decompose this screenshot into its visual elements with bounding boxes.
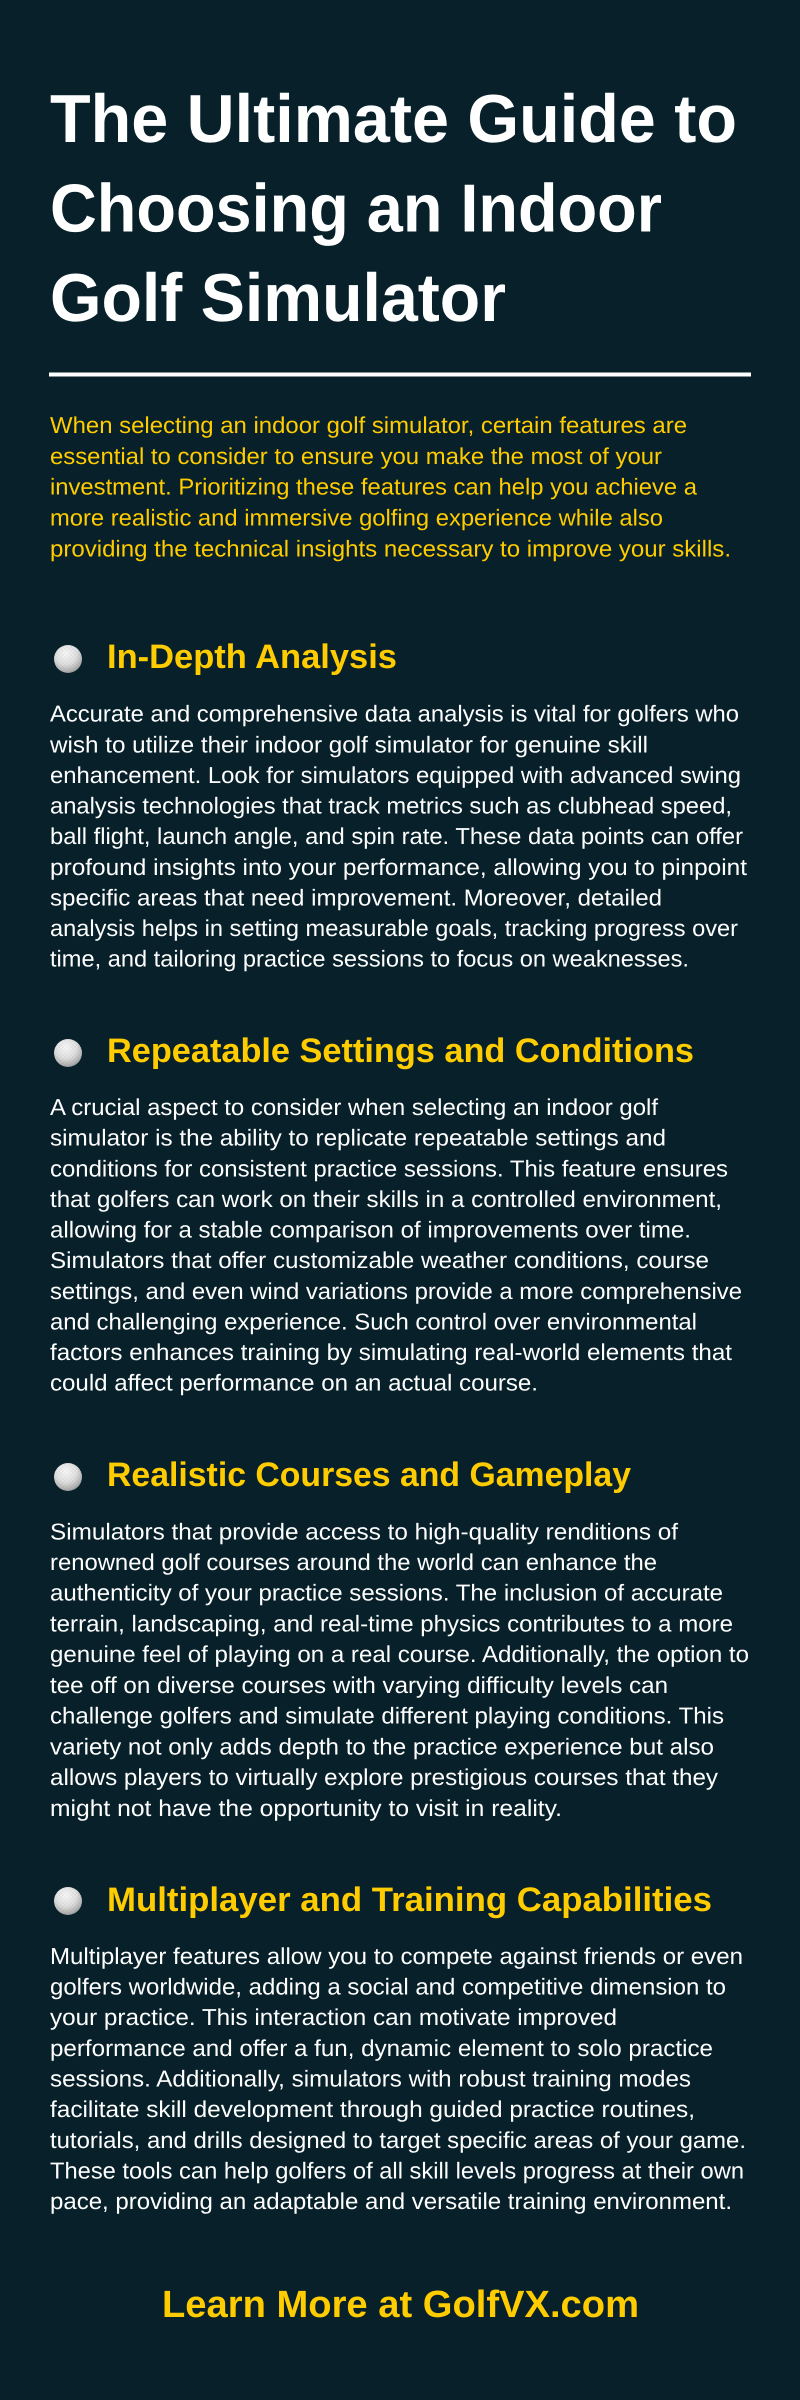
body text: Repeatable Settings and Conditions: conditions for consistent practice sessions. This feature ensures bbox=[50, 1155, 728, 1181]
body text: Multiplayer and Training Capabilities: pace, providing an adaptable and versatile training environment. bbox=[50, 2188, 732, 2214]
body text: Realistic Courses and Gameplay: challenge golfers and simulate different playing conditions. This bbox=[50, 1703, 724, 1729]
body text: Realistic Courses and Gameplay: allows players to virtually explore prestigious courses that they bbox=[50, 1764, 719, 1790]
body text: Multiplayer and Training Capabilities: performance and offer a fun, dynamic element to solo practice bbox=[50, 2035, 713, 2061]
body text: Multiplayer and Training Capabilities: your practice. This interaction can motivate improved bbox=[50, 2004, 617, 2030]
body text: In-Depth Analysis: enhancement. Look for simulators equipped with advanced swing bbox=[50, 762, 741, 788]
icon: golf ball bbox=[54, 1463, 82, 1491]
heading: Realistic Courses and Gameplay: Realistic Courses and Gameplay bbox=[107, 1456, 631, 1494]
body text: In-Depth Analysis bbox=[49, 701, 748, 972]
body text: Multiplayer and Training Capabilities: sessions. Additionally, simulators with robust training modes bbox=[50, 2066, 691, 2092]
body text: Repeatable Settings and Conditions: simulator is the ability to replicate repeatable settings and bbox=[50, 1125, 666, 1151]
body text: Repeatable Settings and Conditions: A crucial aspect to consider when selecting an indoor golf bbox=[50, 1094, 659, 1120]
body text: In-Depth Analysis: wish to utilize their indoor golf simulator for genuine skill bbox=[49, 731, 648, 757]
body text: In-Depth Analysis: Accurate and comprehensive data analysis is vital for golfers who bbox=[50, 701, 739, 727]
body text: Multiplayer and Training Capabilities: Multiplayer features allow you to compete against friends or even bbox=[50, 1943, 743, 1969]
body text: Realistic Courses and Gameplay: variety not only adds depth to the practice experience but also bbox=[50, 1733, 714, 1759]
intro text: providing the technical insights necessary to improve your skills. bbox=[50, 535, 731, 561]
body text: Repeatable Settings and Conditions: Simulators that offer customizable weather conditions, course bbox=[50, 1247, 709, 1273]
panel: Repeatable Settings and Conditions bbox=[50, 1032, 742, 1396]
intro text: When selecting an indoor golf simulator, certain features are bbox=[50, 412, 687, 438]
body text: Realistic Courses and Gameplay: renowned golf courses around the world can enhance the bbox=[50, 1549, 657, 1575]
icon: golf ball bbox=[54, 645, 82, 673]
body text: Multiplayer and Training Capabilities: golfers worldwide, adding a social and competitive dimension to bbox=[50, 1974, 726, 2000]
body text: Repeatable Settings and Conditions: allowing for a stable comparison of improvements over time. bbox=[50, 1216, 691, 1242]
heading: Multiplayer and Training Capabilities: Multiplayer and Training Capabilities bbox=[107, 1881, 712, 1919]
body text: In-Depth Analysis: time, and tailoring practice sessions to focus on weaknesses. bbox=[50, 946, 689, 972]
body text: Realistic Courses and Gameplay: terrain, landscaping, and real-time physics contributes to a more bbox=[50, 1610, 733, 1636]
body text: Repeatable Settings and Conditions: and challenging experience. Such control over environmental bbox=[50, 1308, 697, 1334]
body text: Realistic Courses and Gameplay: tee off on diverse courses with varying difficulty levels can bbox=[50, 1672, 668, 1698]
body text: Repeatable Settings and Conditions bbox=[50, 1094, 742, 1396]
intro text: more realistic and immersive golfing experience while also bbox=[50, 504, 663, 530]
body text: Repeatable Settings and Conditions: settings, and even wind variations provide a more comprehensive bbox=[50, 1278, 742, 1304]
heading: In-Depth Analysis: In-Depth Analysis bbox=[107, 638, 397, 676]
body text: In-Depth Analysis: profound insights into your performance, allowing you to pinpoint bbox=[50, 854, 748, 880]
intro text: investment. Prioritizing these features can help you achieve a bbox=[50, 474, 697, 500]
title bbox=[50, 81, 737, 336]
icon: golf ball bbox=[54, 1887, 82, 1915]
intro text: essential to consider to ensure you make the most of your bbox=[50, 443, 662, 469]
body text: In-Depth Analysis: analysis technologies that track metrics such as clubhead speed, bbox=[50, 793, 732, 819]
footer call to action: Learn More at GolfVX.com bbox=[162, 2284, 639, 2326]
icon: golf ball bbox=[54, 1039, 82, 1067]
panel: Realistic Courses and Gameplay bbox=[50, 1456, 749, 1821]
body text: In-Depth Analysis: ball flight, launch angle, and spin rate. These data points can offer bbox=[50, 823, 743, 849]
body text: Realistic Courses and Gameplay bbox=[50, 1518, 749, 1821]
title: Choosing an Indoor bbox=[50, 170, 662, 246]
title: Golf Simulator bbox=[50, 260, 506, 336]
body text: Multiplayer and Training Capabilities bbox=[50, 1943, 746, 2214]
body text: In-Depth Analysis: specific areas that need improvement. Moreover, detailed bbox=[50, 884, 662, 910]
body text: Repeatable Settings and Conditions: that golfers can work on their skills in a controlled environment, bbox=[50, 1186, 722, 1212]
panel: In-Depth Analysis bbox=[49, 638, 748, 972]
body text: Multiplayer and Training Capabilities: facilitate skill development through guided practice routines, bbox=[50, 2096, 695, 2122]
body text: Realistic Courses and Gameplay: Simulators that provide access to high-quality renditions of bbox=[50, 1518, 679, 1544]
title: The Ultimate Guide to bbox=[50, 81, 737, 157]
body text: Realistic Courses and Gameplay: genuine feel of playing on a real course. Additionally, the option to bbox=[50, 1641, 749, 1667]
panel: Multiplayer and Training Capabilities bbox=[50, 1881, 746, 2214]
body text: Repeatable Settings and Conditions: factors enhances training by simulating real-world elements that bbox=[50, 1339, 733, 1365]
intro text bbox=[50, 412, 731, 561]
body text: Repeatable Settings and Conditions: could affect performance on an actual course. bbox=[50, 1370, 538, 1396]
heading: Repeatable Settings and Conditions: Repeatable Settings and Conditions bbox=[107, 1032, 694, 1070]
body text: Realistic Courses and Gameplay: might not have the opportunity to visit in reality. bbox=[50, 1795, 562, 1821]
body text: Multiplayer and Training Capabilities: tutorials, and drills designed to target specific areas of your game. bbox=[50, 2127, 746, 2153]
body text: Multiplayer and Training Capabilities: These tools can help golfers of all skill levels progress at their own bbox=[50, 2157, 744, 2183]
body text: In-Depth Analysis: analysis helps in setting measurable goals, tracking progress over bbox=[50, 915, 738, 941]
body text: Realistic Courses and Gameplay: authenticity of your practice sessions. The inclusion of accurate bbox=[50, 1580, 723, 1606]
